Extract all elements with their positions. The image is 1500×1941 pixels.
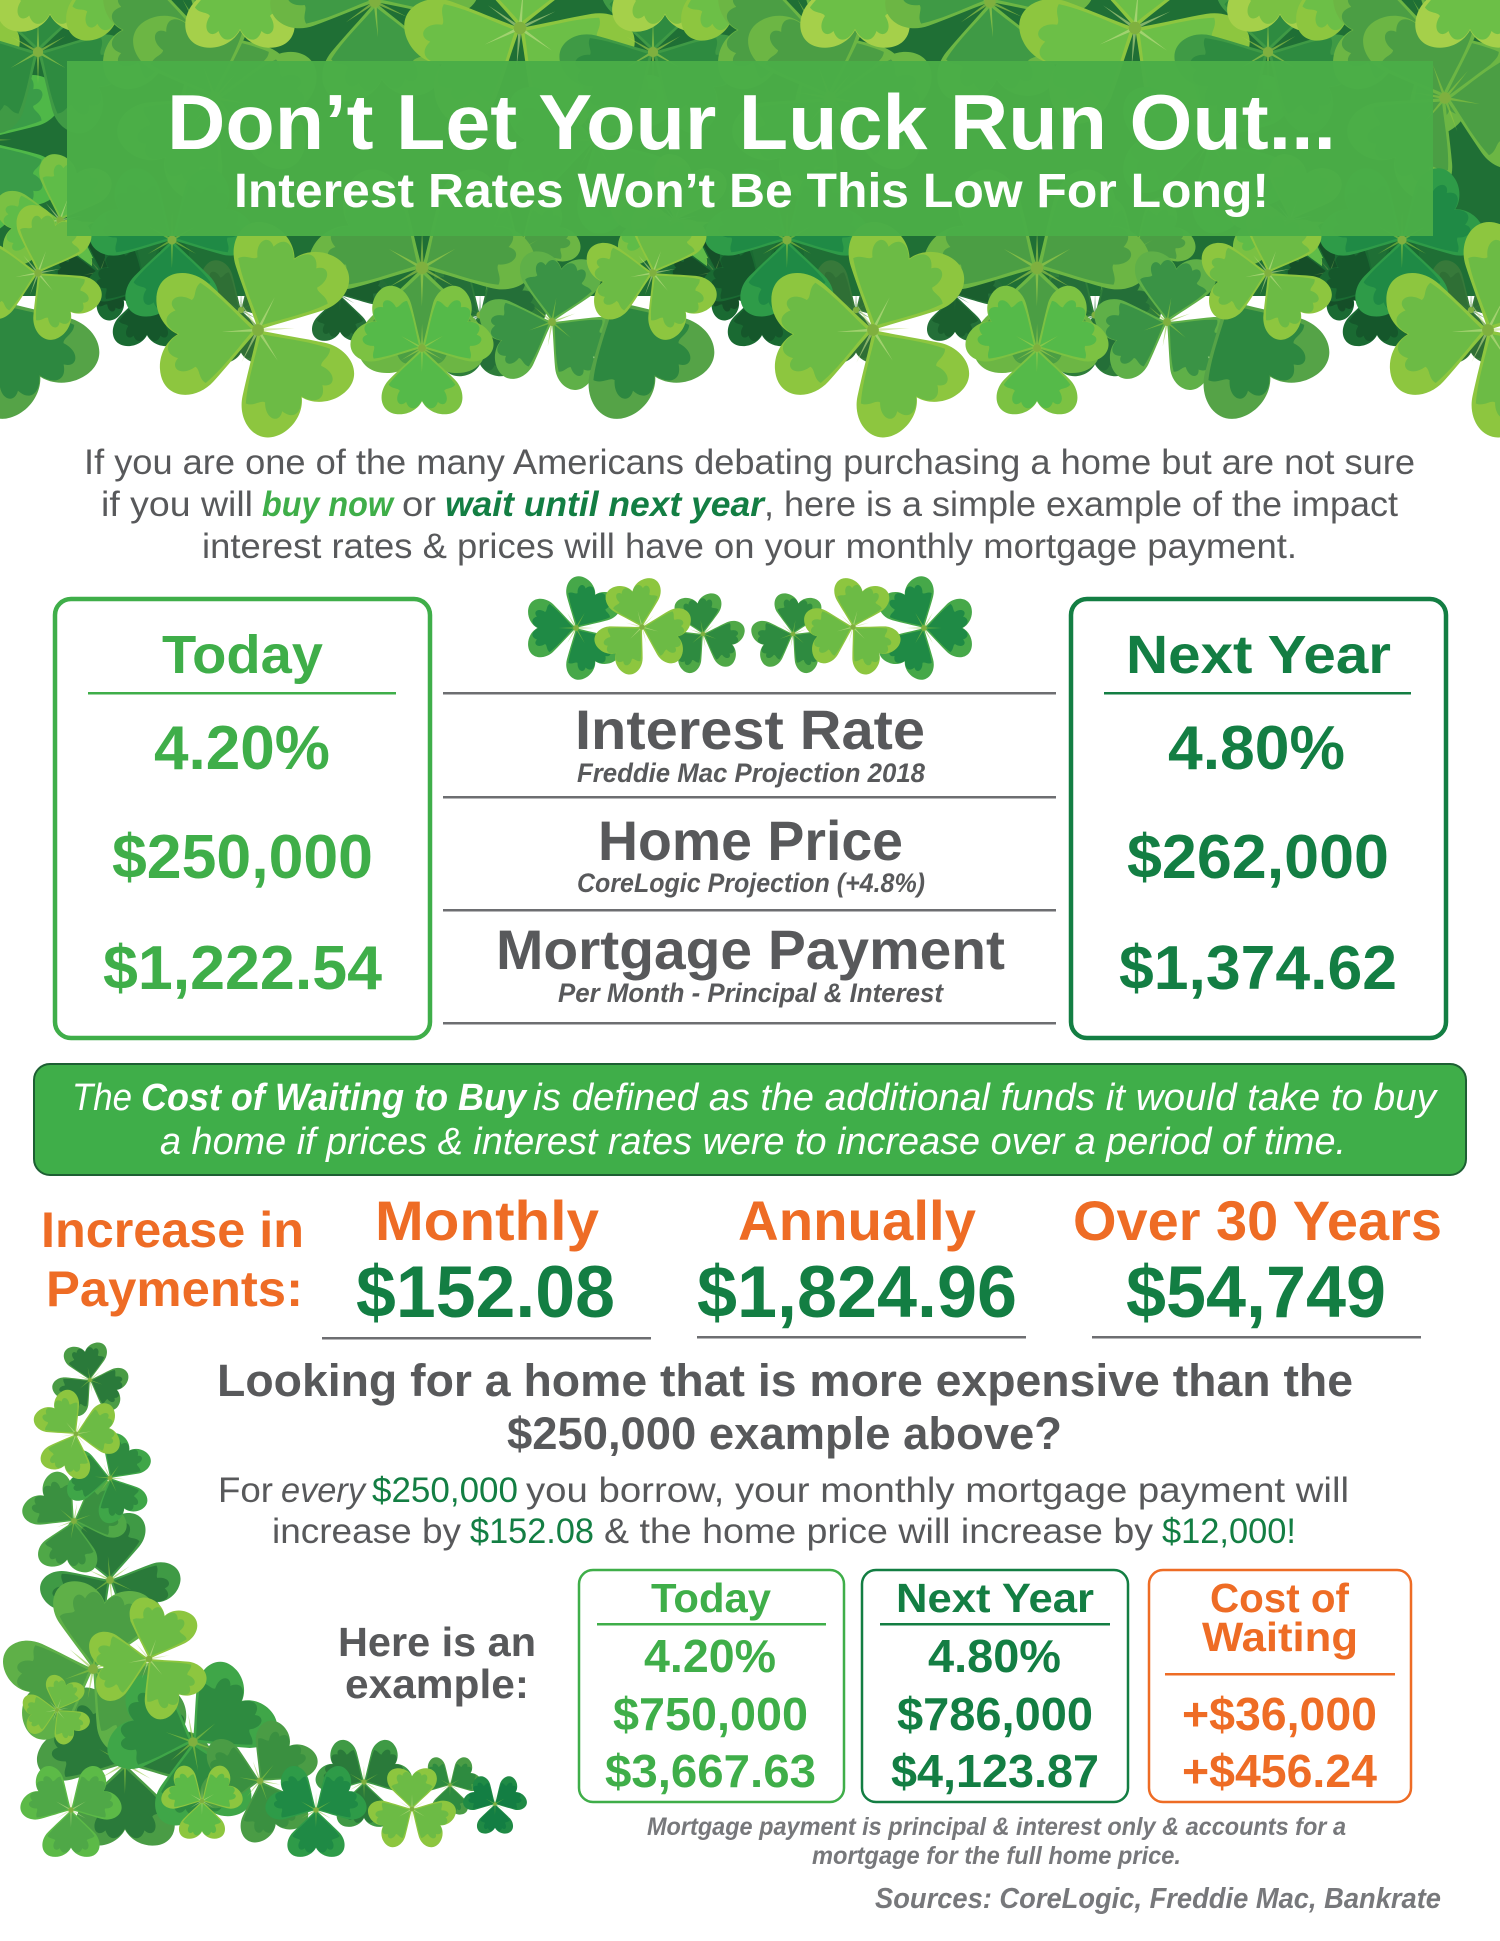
heading: more expensive home: $250,000 example above?	[507, 1408, 1062, 1459]
panel: today: 4.20%	[154, 714, 330, 783]
center labels: CoreLogic Projection (+4.8%)	[577, 868, 925, 898]
icon: clover row	[503, 558, 997, 699]
heading: increase in payments: Payments:	[46, 1261, 303, 1317]
heading: increase in payments	[41, 1202, 304, 1317]
text block: every 250000: every	[281, 1471, 367, 1510]
panel: next year	[1071, 599, 1446, 1038]
panel: example today: $750,000	[613, 1688, 808, 1740]
icon: clover corner	[0, 1338, 538, 1889]
title: Don’t Let Your Luck Run Out...	[167, 78, 1336, 166]
stat: over 30 years	[1073, 1189, 1442, 1338]
panel: example today: Today	[651, 1575, 771, 1621]
text block: every 250000: you borrow, your monthly mortgage payment will	[526, 1471, 1349, 1510]
panel: next year: $262,000	[1127, 823, 1389, 892]
intro text: buy now	[262, 485, 396, 524]
callout: cost of waiting definition	[34, 1064, 1466, 1175]
text: here is an example: Here is an	[338, 1619, 536, 1665]
intro text: , here is a simple example of the impact	[764, 485, 1398, 524]
intro text: wait until next year	[445, 485, 766, 524]
text block: every 250000: $12,000!	[1162, 1512, 1296, 1551]
panel: next year: Next Year	[1126, 625, 1391, 685]
intro text: interest rates & prices will have on your monthly mortgage payment.	[202, 527, 1297, 566]
panel: example next year	[862, 1570, 1128, 1802]
callout: cost of waiting definition: a home if prices & interest rates were to increase over a period of time.	[160, 1121, 1346, 1163]
footnote: Mortgage payment is principal & interest only & accounts for a	[647, 1813, 1346, 1841]
panel: cost of waiting: Cost of	[1210, 1575, 1349, 1621]
sources: Sources: CoreLogic, Freddie Mac, Bankrate	[875, 1883, 1441, 1915]
panel: example next year: $4,123.87	[891, 1745, 1099, 1797]
panel: cost of waiting	[1149, 1570, 1411, 1802]
stat: monthly: Monthly	[375, 1189, 599, 1252]
text: here is an example: example:	[345, 1661, 529, 1707]
text block: every 250000: $250,000	[372, 1471, 518, 1510]
panel: example today	[579, 1570, 844, 1802]
text block: every 250000: $152.08	[470, 1512, 594, 1551]
heading: more expensive home: Looking for a home that is more expensive than the	[217, 1355, 1353, 1406]
panel: next year: $1,374.62	[1119, 934, 1397, 1003]
heading: more expensive home	[217, 1355, 1353, 1459]
stat: over 30 years: $54,749	[1126, 1252, 1386, 1333]
panel: example next year: $786,000	[897, 1688, 1093, 1740]
panel: cost of waiting: +$36,000	[1182, 1688, 1377, 1740]
panel: example next year: Next Year	[896, 1575, 1094, 1621]
callout: cost of waiting definition: Cost of Waiting to Buy	[141, 1077, 528, 1119]
panel: example today: $3,667.63	[605, 1745, 816, 1797]
intro text: or	[402, 485, 436, 524]
text block: every 250000: For	[218, 1471, 273, 1510]
stat: monthly	[322, 1189, 651, 1340]
subtitle: Interest Rates Won’t Be This Low For Long!	[234, 165, 1269, 218]
center labels: Mortgage Payment	[496, 918, 1005, 981]
panel: today: Today	[162, 625, 323, 685]
intro text: If you are one of the many Americans debating purchasing a home but are not sure	[84, 443, 1415, 482]
text: here is an example	[338, 1619, 536, 1707]
footnote	[647, 1813, 1346, 1870]
banner: clover background	[0, 0, 1500, 475]
panel: today	[55, 599, 430, 1038]
callout: cost of waiting definition: is defined as the additional funds it would take to buy	[533, 1077, 1438, 1119]
center labels: Interest Rate	[575, 698, 925, 761]
intro text: if you will	[101, 485, 253, 524]
title panel	[67, 61, 1433, 236]
text block: every 250000: increase by	[272, 1512, 462, 1551]
stat: annually: $1,824.96	[697, 1252, 1017, 1333]
intro text	[84, 443, 1415, 566]
panel: cost of waiting: +$456.24	[1182, 1745, 1377, 1797]
panel: today: $1,222.54	[103, 934, 383, 1003]
callout: cost of waiting definition: The	[72, 1077, 132, 1119]
text block: every 250000: & the home price will increase by	[604, 1512, 1154, 1551]
center labels: Freddie Mac Projection 2018	[577, 758, 925, 788]
stat: over 30 years: Over 30 Years	[1073, 1189, 1442, 1252]
heading: increase in payments: Increase in	[41, 1202, 304, 1258]
stat: monthly: $152.08	[356, 1252, 615, 1333]
panel: cost of waiting: Waiting	[1202, 1614, 1358, 1660]
panel: example next year: 4.80%	[928, 1630, 1061, 1682]
footnote: mortgage for the full home price.	[812, 1842, 1181, 1870]
panel: example today: 4.20%	[644, 1630, 776, 1682]
stat: annually: Annually	[738, 1189, 976, 1252]
panel: today: $250,000	[112, 823, 373, 892]
center labels	[443, 692, 1056, 1024]
panel: next year: 4.80%	[1168, 714, 1345, 783]
text block: every 250000	[218, 1471, 1349, 1551]
center labels: Home Price	[598, 809, 903, 872]
stat: annually	[697, 1189, 1026, 1338]
center labels: Per Month - Principal & Interest	[558, 978, 944, 1008]
